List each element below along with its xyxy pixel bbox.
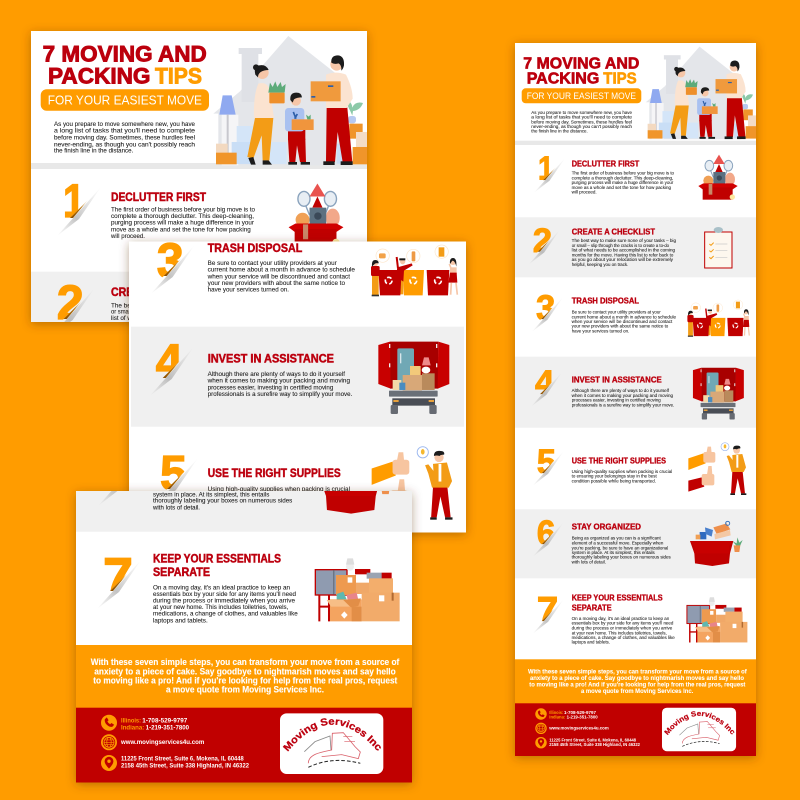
phone numbers: 1-708-529-9797 (142, 718, 188, 724)
tip 4 text: Although there are plenty of ways to do it yourself (208, 371, 345, 378)
footer contact bar (515, 703, 756, 756)
tip 1 text: complete a thorough declutter. This deep-cleaning, (111, 213, 254, 220)
phone numbers: Illinois: (549, 710, 564, 715)
tip 1 text: purging process will make a huge difference in your (572, 180, 674, 185)
intro text: before moving day. Sometimes, these hurdles feel (531, 119, 632, 124)
tip 1 text: move as a whole and set the tone for how packing (111, 226, 251, 233)
subtitle pill: FOR YOUR EASIEST MOVE (527, 91, 636, 101)
title: PACKING (48, 63, 150, 88)
tip 2 text: or small – slip through the cracks is to create a to-do (111, 308, 247, 315)
icon: stacked boxes (687, 597, 747, 642)
tip 7 text: essentials box by your side for any items you'll need (153, 591, 296, 598)
closing band: a move quote from Moving Services Inc. (166, 685, 324, 695)
number 1 (534, 150, 565, 193)
tip 1 text: move as a whole and set the tone for how packing (572, 185, 672, 190)
addresses: 11225 Front Street, Suite 6, Mokena, IL 60448 (549, 737, 637, 742)
tip 1 text: purging process will make a huge difference in your (111, 220, 254, 227)
tip 2 heading: CREATE A CHECKLIST (111, 287, 227, 299)
number 3 (154, 242, 190, 292)
tip 6 text (572, 536, 672, 564)
tip 2 text: list of what needs to be accomplished in the coming (111, 315, 254, 322)
intro text (531, 110, 633, 134)
closing band: to moving like a pro! And if you're looking for help from the real pros, request (529, 682, 746, 689)
number 7: 7 (537, 590, 558, 634)
closing band: to moving like a pro! And if you're looking for help from the real pros, request (93, 676, 397, 686)
tip 7 heading: KEEP YOUR ESSENTIALS (153, 554, 281, 566)
icon: recycling bins with people (687, 300, 749, 337)
intro text: the finish line in the distance. (531, 129, 588, 134)
tip 6 text: element of a successful move. Especially when (572, 540, 664, 545)
tip 1 heading: DECLUTTER FIRST (572, 160, 639, 169)
tip 3 text: your new providers with about the same notice to (208, 280, 346, 287)
phone numbers (549, 710, 598, 720)
closing band: anxiety to a piece of cake. Say goodbye to nightmarish moves and say hello (94, 666, 396, 676)
number 5: 5 (537, 443, 556, 482)
tip 5 text: condition possible while being transported. (572, 478, 656, 483)
tip 4 text (207, 371, 353, 398)
tip 7 text: at your new home. This includes toiletries, towels, (153, 604, 289, 611)
tip 7 text: medications, a change of clothes, and valuables like (153, 611, 298, 618)
icon: moving truck (693, 368, 744, 420)
closing band: anxiety to a piece of cake. Say goodbye to nightmarish moves and say hello (530, 675, 744, 682)
number 3: 3 (157, 233, 184, 289)
tip 7 text: at your new home. This includes toiletries, towels, (572, 630, 667, 635)
icon: thumbs up and person (372, 447, 453, 520)
icon: stacked boxes (315, 558, 400, 621)
tip 4 text: processes easier, investing in certified moving (572, 398, 661, 403)
tip 7 heading: SEPARATE (153, 567, 210, 579)
icon: declutter box (289, 184, 343, 246)
tip 2 heading: CREATE A CHECKLIST (572, 227, 655, 236)
tip 7 heading: KEEP YOUR ESSENTIALS (572, 594, 663, 603)
icon: map pin (535, 737, 547, 748)
tip 7 text: during the process or immediately when you arrive (153, 597, 296, 604)
tip 1 text: will proceed. (110, 233, 145, 240)
phone numbers: 1-219-351-7800 (146, 725, 190, 731)
panel: front page three, tips 6-7 and footer (70, 486, 419, 790)
tip 7 text (153, 584, 298, 624)
icon: moving truck (378, 342, 449, 414)
tip 6 text: system in place. At its simplest, this entails (153, 492, 269, 499)
tip 3 text: current home about a month in advance to schedule (208, 267, 356, 274)
number 2: 2 (533, 222, 552, 260)
icon: thumbs up and person (688, 443, 746, 495)
phone numbers: 1-708-529-9797 (564, 710, 597, 715)
number 4: 4 (535, 364, 554, 402)
number 4: 4 (156, 336, 183, 389)
tip 3 text: when your service will be discontinued and contact (207, 273, 350, 280)
tip 6 text: with lots of detail. (152, 504, 200, 511)
tip 7 heading: SEPARATE (572, 603, 612, 612)
tip 7 heading (153, 554, 281, 579)
subtitle pill (41, 89, 209, 111)
number 7: 7 (103, 546, 133, 608)
subtitle pill (522, 88, 641, 103)
tip 7 text: essentials box by your side for any items you'll need (572, 621, 674, 626)
hero illustration: family moving (646, 47, 757, 139)
title: PACKING (527, 70, 599, 87)
closing band: With these seven simple steps, you can transform your move from a source of (91, 657, 399, 667)
closing band: With these seven simple steps, you can transform your move from a source of (528, 668, 748, 675)
number 4 (154, 344, 188, 392)
icon: organized box (690, 521, 743, 566)
tip 2 text: as you go about your relocation will be extremely (572, 257, 674, 262)
tip 6 text: system in place. At its simplest, this entails (572, 550, 655, 555)
closing band: a move quote from Moving Services Inc. (581, 688, 694, 695)
subtitle pill: FOR YOUR EASIEST MOVE (48, 92, 202, 107)
tip 3 text: Be sure to contact your utility providers at your (572, 309, 661, 314)
addresses: 2158 45th Street, Suite 338 Highland, IN 46322 (549, 742, 641, 747)
tip 4 heading: INVEST IN ASSISTANCE (572, 375, 662, 384)
addresses (121, 757, 250, 769)
title: TIPS (155, 63, 202, 88)
number 3 (532, 289, 563, 332)
panel: right full-length infographic (509, 39, 762, 764)
tip 3 text: have your services turned on. (208, 287, 289, 294)
intro text: the finish line in the distance. (54, 148, 134, 155)
tip 2 text: months for the move. Having this list to refer back to (572, 252, 674, 257)
tip 1 text: will proceed. (572, 190, 597, 195)
intro text: before moving day. Sometimes, these hurdles feel (54, 135, 195, 142)
intro text: never-ending, as though you can't possibly reach (531, 124, 633, 129)
phone numbers: Illinois: (121, 718, 141, 724)
tip 5 heading: USE THE RIGHT SUPPLIES (572, 456, 666, 465)
title (523, 55, 639, 87)
logo (662, 708, 736, 752)
icon: globe (101, 734, 117, 750)
panel: middle page two, tips 3-5 (129, 233, 466, 532)
tip 4 text: when it comes to making your packing and moving (572, 393, 674, 398)
intro text: a long list of tasks that you'll need to complete (54, 128, 196, 135)
tip 7 text: On a moving day, it's an ideal practice to keep an (572, 616, 670, 621)
addresses: 2158 45th Street, Suite 338 Highland, IN 46322 (121, 763, 250, 769)
tip 4 text: when it comes to making your packing and moving (207, 378, 350, 385)
tip 2 text: or small – slip through the cracks is to create a to-do (572, 243, 670, 248)
closing band (515, 659, 756, 704)
tip 3 text: your new providers with about the same notice to (572, 324, 669, 329)
number 2 (58, 284, 89, 322)
tip 6 text: thoroughly labeling your boxes on numerous sides (153, 498, 292, 505)
intro text: As you prepare to move somewhere new, you have (531, 110, 633, 115)
logo (280, 713, 384, 774)
number 5 (160, 455, 194, 491)
tip 7 text: during the process or immediately when you arrive (572, 626, 673, 631)
addresses (549, 737, 641, 747)
tip 1 text: The first order of business before your big move is to (111, 206, 256, 213)
tip 2 text: helpful, keeping you on track. (572, 262, 628, 267)
phone numbers: Indiana: (121, 725, 144, 731)
tip 3 text: current home about a month in advance to schedule (572, 314, 677, 319)
tip 6 text: thoroughly labeling your boxes on numerous sides (572, 555, 672, 560)
tip 7 text: laptops and tablets. (153, 617, 208, 624)
tip 6 text (153, 492, 292, 510)
tip 2 text (572, 238, 677, 267)
tip 1 text (110, 206, 256, 240)
number 7 (100, 558, 136, 606)
icon: clipboard checklist (705, 227, 732, 268)
website: www.movingservices4u.com (120, 740, 204, 746)
tip 3 text: when your service will be discontinued and contact (572, 319, 673, 324)
number 7 (532, 590, 564, 634)
tip 7 text (572, 616, 675, 645)
number 1: 1 (63, 174, 85, 227)
tip 4 text: professionals is a surefire way to simplify your move. (208, 391, 353, 398)
footer contact bar (76, 708, 412, 782)
intro text: As you prepare to move somewhere new, you have (54, 121, 196, 128)
tip 6 text: with lots of detail. (572, 559, 606, 564)
tip 5 text: to ensuring your belongings stay in the best (572, 474, 657, 479)
tip 2 text: list of what needs to be accomplished in the coming (572, 248, 676, 253)
icon: recycling bins with people (371, 245, 457, 296)
phone numbers: Indiana: (549, 715, 566, 720)
number 6: 6 (537, 514, 555, 553)
title: 7 MOVING AND (523, 55, 639, 72)
tip 5 text (572, 469, 672, 483)
number 2: 2 (57, 277, 84, 330)
addresses: 11225 Front Street, Suite 6, Mokena, IL 60448 (121, 757, 244, 763)
number 3: 3 (536, 289, 555, 329)
closing band (76, 645, 412, 708)
intro text (54, 121, 196, 155)
hero illustration: family moving (213, 36, 368, 165)
tip 2 text: The best way to make sure none of your tasks – big (111, 302, 256, 309)
icon: organized box (324, 491, 390, 514)
tip 4 text: professionals is a surefire way to simplify your move. (572, 403, 674, 408)
tip 1 text (572, 170, 675, 195)
tip 2 text: The best way to make sure none of your tasks – big (572, 238, 677, 243)
number 2 (528, 222, 560, 265)
tip 4 text: Although there are plenty of ways to do it yourself (572, 388, 670, 393)
title (43, 46, 206, 84)
tip 6 text: Being as organized as you can is a significant (572, 536, 661, 541)
website: www.movingservices4u.com (548, 725, 609, 730)
tip 3 text (207, 260, 356, 294)
tip 5 text: Using high-quality supplies when packing is crucial (208, 486, 350, 493)
tip 2 text (111, 303, 129, 320)
tip 3 text (572, 309, 677, 333)
tip 7 text: laptops and tablets. (572, 640, 610, 645)
tip 3 text: have your services turned on. (572, 328, 629, 333)
tip 3 text: Be sure to contact your utility providers at your (208, 260, 337, 267)
number 6 fold remnant (102, 491, 118, 503)
tip 1 heading: DECLUTTER FIRST (111, 192, 206, 204)
icon: globe (535, 723, 547, 734)
intro text: a long list of tasks that you'll need to complete (531, 115, 633, 120)
title: 7 MOVING AND (43, 42, 207, 67)
tip 6 text: you're packing, be sure to have an organizational (572, 545, 668, 550)
icon: declutter box (698, 155, 738, 200)
tip 7 text: medications, a change of clothes, and valuables like (572, 635, 675, 640)
tip 5 heading: USE THE RIGHT SUPPLIES (208, 468, 341, 480)
tip 7 text: On a moving day, it's an ideal practice to keep an (153, 584, 290, 591)
tip 6 heading: STAY ORGANIZED (572, 523, 641, 532)
icon: phone (535, 708, 547, 720)
phone numbers: 1-219-351-7800 (567, 715, 598, 720)
title: TIPS (603, 70, 637, 87)
phone numbers (121, 718, 189, 730)
tip 4 text (572, 388, 674, 408)
icon: phone (101, 715, 117, 731)
number 5: 5 (160, 447, 187, 501)
number 4 (531, 364, 562, 407)
intro text: never-ending, as though you can't possibly reach (54, 141, 195, 148)
number 6 (532, 514, 564, 557)
number 6 fold remnant: 6 (104, 446, 130, 500)
tip 3 heading: TRASH DISPOSAL (572, 296, 639, 305)
tip 7 heading (572, 594, 663, 612)
tip 3 heading: TRASH DISPOSAL (208, 243, 302, 255)
tip 1 text: The first order of business before your big move is to (572, 170, 675, 175)
logo: Moving Services Inc (282, 718, 381, 752)
logo: Moving Services Inc (664, 711, 734, 736)
number 1 (60, 184, 96, 233)
panel: left page one, hero and tips 1-2 (31, 31, 368, 337)
number 1: 1 (538, 150, 554, 187)
tip 1 text: complete a thorough declutter. This deep-cleaning, (572, 175, 673, 180)
icon: map pin (101, 755, 117, 771)
tip 5 text: Using high-quality supplies when packing is crucial (572, 469, 672, 474)
number 5 (532, 443, 564, 486)
tip 4 heading: INVEST IN ASSISTANCE (208, 354, 334, 366)
tip 4 text: processes easier, investing in certified moving (208, 384, 333, 391)
